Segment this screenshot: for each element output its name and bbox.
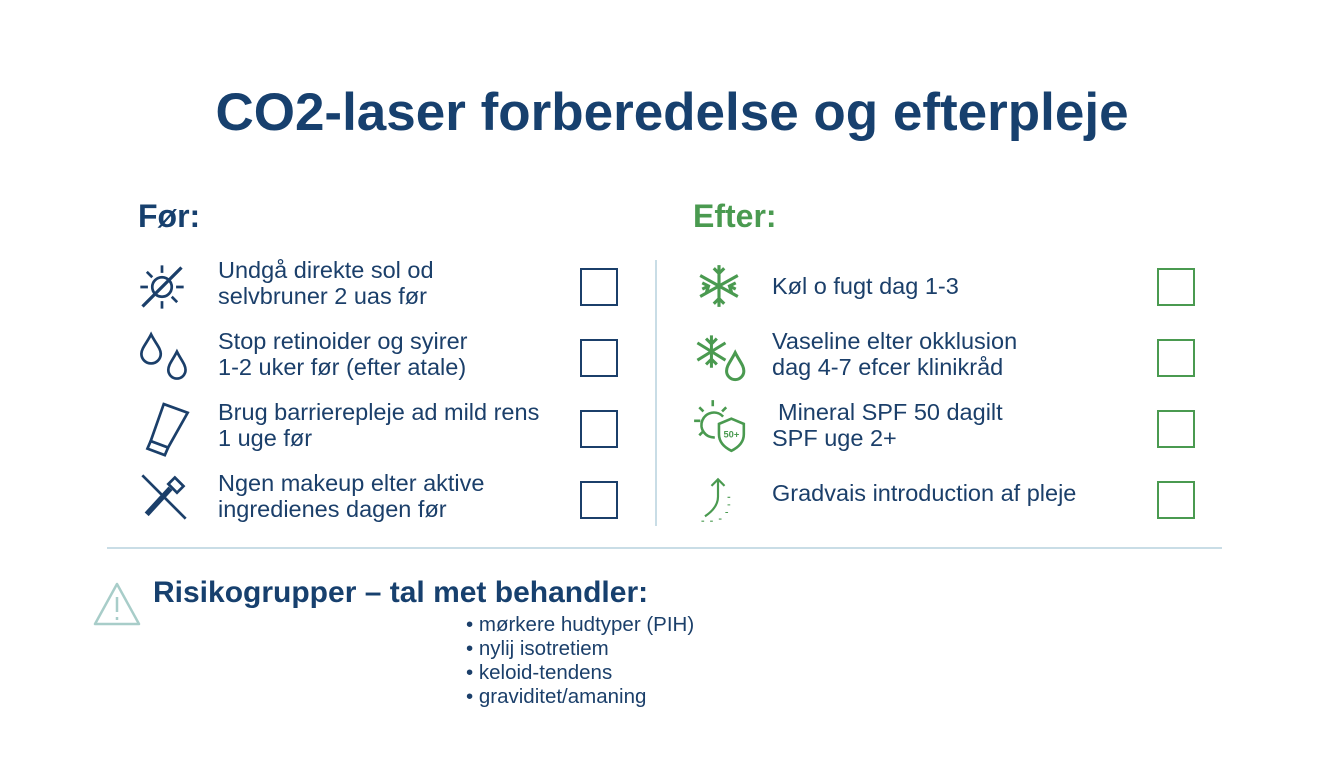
icon: drops	[140, 332, 187, 380]
icon: no makeup	[141, 474, 187, 520]
icon: warning	[94, 582, 140, 626]
icon: sun shield 50+	[694, 400, 746, 452]
bullet list: risks: • mørkere hudtyper (PIH)	[466, 613, 694, 636]
icon: snowflake drop	[696, 335, 746, 382]
divider horizontal	[107, 547, 1222, 549]
icon: tube	[146, 402, 190, 457]
text 2	[218, 328, 468, 380]
bullet list: risks: • nylij isotretiem	[466, 637, 609, 660]
checkbox 1	[1157, 268, 1195, 306]
icon: gradual arrow	[701, 478, 730, 522]
divider vertical	[655, 260, 657, 526]
checkbox 2	[580, 339, 618, 377]
heading: risk groups: Risikogrupper – tal met behandler:	[153, 576, 648, 609]
icon: snowflake	[700, 265, 738, 307]
text 3: SPF uge 2+	[772, 425, 897, 451]
text 2: Stop retinoider og syirer	[218, 328, 467, 354]
text 1	[218, 257, 434, 309]
checkbox 4	[580, 481, 618, 519]
text 4	[218, 470, 484, 522]
checkbox 3	[1157, 410, 1195, 448]
text 2: dag 4-7 efcer klinikråd	[772, 354, 1003, 380]
text 2	[772, 328, 1017, 380]
text 1: Køl o fugt dag 1-3	[772, 273, 959, 299]
bullet list: risks: • graviditet/amaning	[466, 685, 646, 708]
checkbox 2	[1157, 339, 1195, 377]
title: CO2-laser forberedelse og efterpleje	[215, 83, 1129, 142]
icon: no sun	[140, 265, 184, 309]
icon: sun shield 50+: 50+	[723, 429, 740, 439]
text 3: Mineral SPF 50 dagilt	[778, 399, 1003, 425]
heading: Efter: Efter:	[693, 198, 777, 234]
bullet list: risks: • keloid-tendens	[466, 661, 612, 684]
text 3: 1 uge før	[218, 425, 312, 451]
checkbox 3	[580, 410, 618, 448]
panel: før list	[140, 257, 618, 522]
text 2: Vaseline elter okklusion	[772, 328, 1017, 354]
text 3	[772, 399, 1003, 451]
bullet list: risks	[466, 613, 694, 708]
heading: Før: Før:	[138, 198, 200, 234]
checkbox 4	[1157, 481, 1195, 519]
text 4: Ngen makeup elter aktive	[218, 470, 484, 496]
text 1: selvbruner 2 uas før	[218, 283, 427, 309]
panel: efter list	[694, 265, 1195, 522]
text 4: ingredienes dagen før	[218, 496, 447, 522]
text 3: Brug barrierepleje ad mild rens	[218, 399, 539, 425]
text 1: Undgå direkte sol od	[218, 257, 434, 283]
text 2: 1-2 uker før (efter atale)	[218, 354, 466, 380]
text 3	[218, 399, 539, 451]
checkbox 1	[580, 268, 618, 306]
text 4: Gradvais introduction af pleje	[772, 480, 1076, 506]
